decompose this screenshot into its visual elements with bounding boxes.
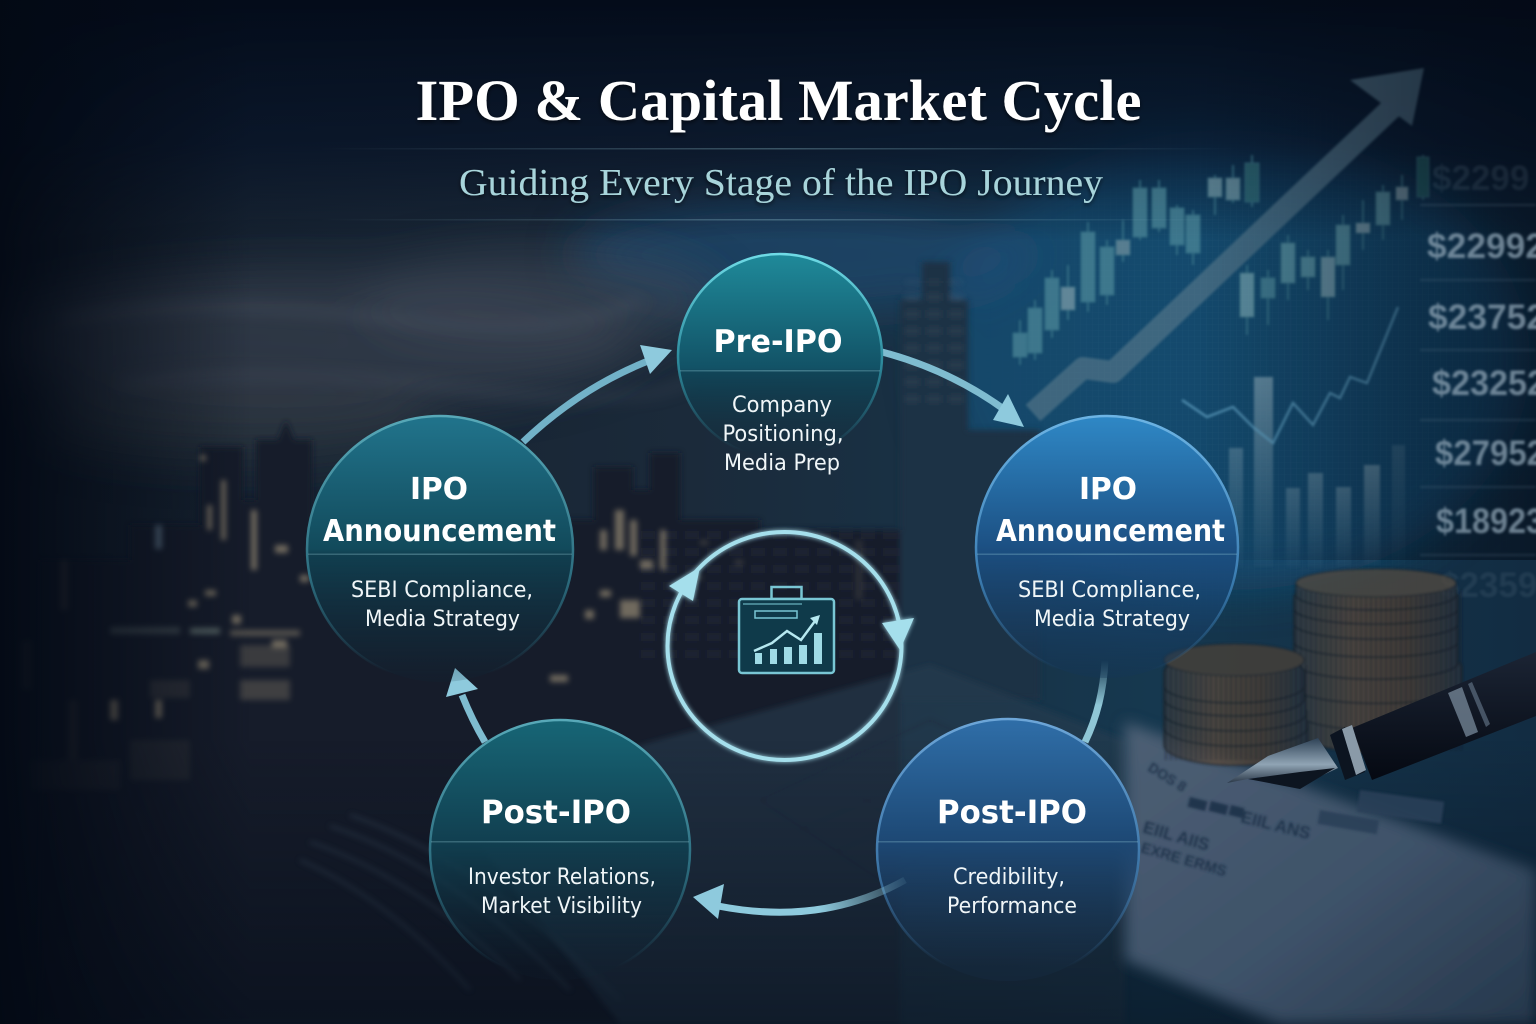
document print text: DOS 8 (1145, 759, 1190, 795)
heading: IPO Announcement (996, 472, 1225, 549)
document print text: EIIL AIIS (1141, 818, 1212, 855)
heading: IPO Announcement (323, 472, 556, 549)
bottom divider (320, 219, 1240, 220)
panel: IPO Announcement (teal) (307, 416, 573, 682)
title: IPO & Capital Market Cycle (416, 68, 1142, 133)
heading: Post-IPO: Post-IPO (937, 793, 1087, 831)
text: Post-IPO details (468, 865, 656, 919)
panel: Post-IPO (teal) (430, 720, 690, 980)
paper sheet (1125, 722, 1536, 1024)
fountain pen (1227, 652, 1536, 789)
subtitle: Guiding Every Stage of the IPO Journey (459, 162, 1103, 204)
text: Pre-IPO details: Company (732, 393, 832, 418)
city window lights (20, 455, 863, 790)
text: Post-IPO details: Performance (947, 894, 1077, 919)
text: Post-IPO details: Credibility, (953, 865, 1065, 890)
panel: Pre-IPO (678, 254, 882, 476)
arrow: announcement to pre-IPO (523, 345, 672, 442)
blue glow behind chart (570, 130, 1530, 590)
top divider (320, 148, 1240, 150)
arrow: announcement to post-IPO (1085, 660, 1105, 742)
grid texture and vignettes (1116, 234, 1230, 462)
text: announcement details (1018, 578, 1201, 632)
text: Post-IPO details: Investor Relations, (468, 865, 656, 890)
text: announcement details: SEBI Compliance, (351, 578, 533, 603)
heading: IPO Announcement: IPO (1079, 472, 1137, 507)
open book pages (300, 815, 620, 1000)
price list: $2359 (1440, 566, 1536, 605)
cloudy sky (0, 250, 720, 460)
heading: IPO Announcement: Announcement (996, 514, 1225, 549)
heading: IPO Announcement: IPO (410, 472, 468, 507)
candlesticks (1013, 155, 1429, 365)
text: announcement details: Media Strategy (1034, 607, 1190, 632)
panel: IPO Announcement (blue) (976, 416, 1238, 678)
heading: IPO Announcement: Announcement (323, 514, 556, 549)
arrow: pre-IPO to announcement (882, 352, 1024, 427)
document print text (1139, 759, 1444, 880)
price list (1420, 159, 1536, 605)
icon: briefcase with growth chart (739, 587, 834, 673)
text: Pre-IPO details: Media Prep (724, 451, 840, 476)
coin stacks (1164, 569, 1464, 765)
price list: $2299 (1432, 159, 1529, 198)
document on desk (460, 665, 1125, 1024)
document print text: EIIL ANS (1239, 807, 1312, 843)
text: announcement details: SEBI Compliance, (1018, 578, 1201, 603)
heading: Pre-IPO: Pre-IPO (714, 324, 842, 360)
arrow: post-IPO to announcement (446, 668, 485, 742)
line chart (1182, 307, 1398, 443)
text: announcement details (351, 578, 533, 632)
stock chart rising arrow (1033, 68, 1424, 413)
text: Post-IPO details: Market Visibility (481, 894, 642, 919)
text: announcement details: Media Strategy (365, 607, 520, 632)
volume bars (1229, 377, 1405, 568)
text: Pre-IPO details (722, 393, 844, 476)
document print text: EXRE ERMS (1139, 840, 1229, 880)
panel: Post-IPO (blue) (877, 719, 1139, 981)
blurred city skyline (40, 262, 1040, 1024)
text: Post-IPO details (947, 865, 1077, 919)
text: Pre-IPO details: Positioning, (722, 422, 844, 447)
center cycle icon (668, 532, 914, 760)
arrow: post-IPO to post-IPO (693, 880, 905, 919)
cycle ring (668, 532, 914, 760)
heading: Post-IPO: Post-IPO (481, 793, 631, 831)
